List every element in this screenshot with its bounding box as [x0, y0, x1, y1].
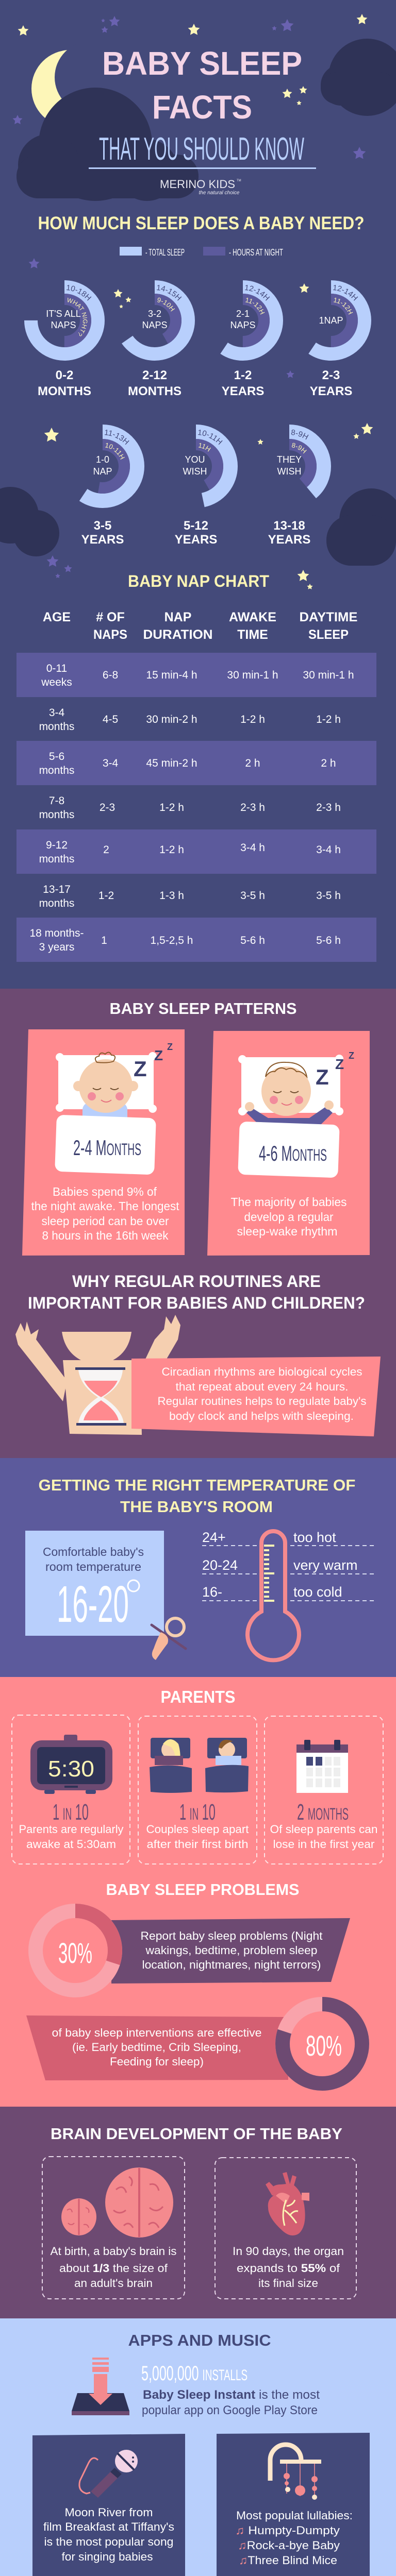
ring chart: 13-18 years: YEARS	[268, 533, 310, 547]
text: 2-4 months fact	[31, 1185, 179, 1242]
heading: room temperature: GETTING THE RIGHT TEMPERATURE OF	[38, 1476, 356, 1494]
panel: couples sleep apart: after their first birth	[146, 1838, 249, 1851]
table body rows: weeks	[41, 676, 72, 688]
panel: parents awake 5:30: awake at 5:30am	[26, 1838, 116, 1851]
section: temperature background	[0, 1458, 396, 1677]
panel: couples sleep apart: 1 IN 10	[179, 1800, 216, 1825]
callout: circadian rhythms: that repeat about every 24 hours.	[175, 1380, 349, 1393]
table body rows: 2 h	[321, 757, 336, 769]
logo: merino kids header: TM	[237, 179, 241, 182]
panel: brain size	[42, 2157, 185, 2299]
section: baby sleep patterns background	[0, 989, 396, 1458]
table body rows: 1-3 h	[159, 890, 184, 902]
table body rows: 2-3 h	[240, 802, 265, 814]
text: app installs: Baby Sleep Instant is the most	[143, 2388, 320, 2402]
ring chart: 2-3 years: 12-14H	[333, 285, 358, 301]
icon: sleeping baby 1: Z	[154, 1047, 163, 1063]
card: moon river song: film Breakfast at Tiffany's	[43, 2520, 174, 2533]
card: moon river song: is the most popular song	[44, 2535, 173, 2548]
banner: 80% interventions: (ie. Early bedtime, Crib Sleeping,	[72, 2041, 241, 2054]
panel: organ growth	[215, 2158, 356, 2299]
card: popular lullabies: ♫Three Blind Mice	[239, 2554, 337, 2567]
text: 2-4 months fact: Babies spend 9% of	[53, 1185, 157, 1198]
table body rows: months	[39, 809, 74, 821]
icon: figure with hourglass	[15, 1315, 180, 1435]
panel: parents awake 5:30: 1 IN 10	[53, 1800, 89, 1825]
heading: why regular routines: IMPORTANT FOR BABIES AND CHILDREN?	[28, 1294, 365, 1312]
callout: circadian rhythms	[131, 1357, 381, 1436]
ring chart: 5-12 years: YEARS	[175, 533, 217, 547]
ring chart: 1-2 years: 2-1	[236, 309, 250, 319]
card: popular lullabies: Most populat lullabies:	[236, 2509, 353, 2522]
icon: waking baby 2: Z	[349, 1050, 354, 1061]
icon: two beds	[150, 1738, 249, 1793]
card: popular lullabies: ♫Rock-a-bye Baby	[238, 2539, 340, 2552]
table body rows: 1-2 h	[316, 714, 341, 725]
table body rows: 2 h	[245, 757, 260, 769]
panel: comfortable temperature: 16-20	[57, 1575, 129, 1633]
table body rows: months	[39, 853, 74, 865]
table body rows: 1	[101, 935, 107, 946]
title: FACTS	[152, 89, 252, 126]
table header row: DURATION	[143, 628, 212, 642]
icon: waking baby 2	[238, 1050, 354, 1131]
banner: 80% interventions	[26, 2015, 288, 2080]
text: app installs: 5,000,000 INSTALLS	[141, 2362, 248, 2385]
panel: comfortable temperature: room temperature	[45, 1560, 141, 1573]
text: 4-6 months fact	[231, 1195, 346, 1238]
subtitle	[89, 131, 316, 169]
table body rows: months	[39, 721, 74, 733]
banner: 30% sleep problems: location, nightmares, night terrors)	[142, 1958, 321, 1971]
heading: room temperature: THE BABY'S ROOM	[120, 1498, 273, 1516]
scale labels: temperature: 20-24	[202, 1557, 238, 1573]
ring chart: 3-5 years	[79, 425, 144, 547]
ring chart: 5-12 years: 5-12	[184, 519, 208, 533]
legend: - TOTAL SLEEP	[145, 247, 185, 258]
table body rows: 9-12	[46, 839, 68, 851]
card: moon river song: for singing babies	[62, 2550, 153, 2563]
scale labels: temperature: very warm	[293, 1557, 358, 1573]
heading: apps and music: APPS AND MUSIC	[128, 2331, 271, 2349]
callout: circadian rhythms: body clock and helps with sleeping.	[169, 1410, 354, 1422]
panel: organ growth: expands to 55% of	[237, 2262, 340, 2275]
heading: brain development: BRAIN DEVELOPMENT OF THE BABY	[51, 2125, 342, 2143]
table body rows: 7-8	[49, 795, 64, 807]
scale labels: temperature: too hot	[293, 1530, 336, 1545]
table body rows: 1-2	[98, 890, 114, 902]
logo: merino kids header	[160, 178, 241, 196]
ring chart: 13-18 years: 8-9H	[291, 430, 308, 440]
table body rows: 2-3 h	[316, 802, 341, 814]
cloud: right header	[321, 39, 396, 116]
icon: waking baby 2: Z	[316, 1065, 329, 1089]
section: brain development background	[0, 2107, 396, 2318]
panel: organ growth: its final size	[258, 2277, 318, 2290]
ring chart: 3-5 years: YEARS	[81, 533, 124, 547]
ring chart: 2-12 months: 2-12	[142, 368, 167, 382]
icon: baby mobile	[270, 2445, 321, 2500]
ring chart: 1-2 years: 12-14H	[245, 285, 270, 301]
banner: 30% sleep problems: Report baby sleep problems (Night	[140, 1929, 323, 1942]
table body rows: 13-17	[43, 884, 71, 895]
table body rows: 1,5-2,5 h	[151, 935, 193, 946]
blanket label: 2-4 months: 2-4 MONTHS	[73, 1136, 141, 1160]
banner: 80% interventions: of baby sleep interventions are effective	[52, 2026, 262, 2039]
panel: organ growth: In 90 days, the organ	[233, 2245, 344, 2258]
panel: 2 months of sleep: Of sleep parents can	[270, 1823, 377, 1836]
table body rows: 0-11	[46, 663, 67, 674]
table body rows: 2-3	[100, 802, 115, 814]
section: apps and music background	[0, 2318, 396, 2576]
blanket label: 2-4 months	[55, 1115, 156, 1175]
icon: microphone	[79, 2450, 138, 2498]
panel: parents awake 5:30: Parents are regularly	[19, 1823, 124, 1836]
ring chart: 2-3 years: 1NAP	[319, 315, 343, 326]
table body rows: 4-5	[103, 714, 118, 725]
ring chart: 13-18 years: THEY	[277, 454, 302, 465]
ring chart: 0-2 months: IT'S ALL	[46, 309, 81, 319]
ring chart: 5-12 years: 10-11H	[198, 430, 223, 445]
heading: baby nap chart: BABY NAP CHART	[128, 572, 269, 590]
text: 2-4 months fact: the night awake. The longest	[31, 1199, 179, 1213]
icon: moon	[31, 41, 127, 127]
table body rows: 18 months-	[29, 927, 84, 939]
icon: waking baby 2: Z	[335, 1056, 344, 1072]
table header row: # OF	[96, 610, 125, 624]
table body rows: 5-6 h	[240, 935, 265, 946]
ring chart: 0-2 months	[24, 280, 105, 398]
table: nap chart	[16, 610, 376, 962]
table body rows: months	[39, 765, 74, 776]
ring chart: 5-12 years: WISH	[183, 466, 207, 477]
card: 2-4 months	[22, 1029, 185, 1256]
icon: calendar	[296, 1740, 348, 1793]
table body rows: 3-4 h	[240, 842, 265, 854]
panel: comfortable temperature	[25, 1531, 164, 1636]
icon: brains	[61, 2167, 173, 2238]
table body rows: 5-6 h	[316, 935, 341, 946]
card: popular lullabies	[217, 2433, 370, 2576]
table header row	[43, 610, 358, 642]
blanket label: 4-6 months: 4-6 MONTHS	[259, 1141, 327, 1165]
ring chart: 3-5 years: 11-13H	[105, 430, 129, 445]
clouds: bottom of rings section	[0, 487, 396, 566]
ring chart: 3-5 years: 10-11H	[105, 443, 125, 460]
ring chart: 5-12 years: YOU	[185, 454, 205, 465]
table body rows: 45 min-2 h	[146, 757, 197, 769]
table body rows: 3 years	[39, 941, 74, 953]
ring chart: 0-2 months: NAPS	[51, 320, 76, 330]
section: parents background	[0, 1677, 396, 2107]
ring chart: 3-5 years: 1-0	[96, 454, 109, 465]
banner: 30% sleep problems	[111, 1918, 350, 1984]
ring chart: 1-2 years: YEARS	[222, 384, 264, 398]
ring chart: 2-3 years: 11-12H	[334, 298, 353, 314]
table body rows: 3-4	[103, 757, 118, 769]
heading: baby nap chart	[47, 555, 313, 590]
table body rows: 2	[103, 844, 109, 856]
section: night header background	[0, 0, 396, 989]
ring chart: 3-5 years: 3-5	[94, 519, 111, 533]
ring chart: 0-2 months: MONTHS	[38, 384, 91, 398]
table body rows: 1-2 h	[159, 844, 184, 856]
callout: circadian rhythms: Circadian rhythms are biological cycles	[162, 1365, 362, 1378]
blanket label: 4-6 months	[238, 1122, 340, 1178]
stars: header	[12, 14, 367, 159]
card: 4-6 months	[207, 1031, 370, 1256]
heading: why regular routines: WHY REGULAR ROUTINES ARE	[72, 1272, 321, 1291]
heading: why regular routines	[28, 1272, 365, 1312]
cloud: left header	[16, 88, 199, 201]
legend: - HOURS AT NIGHT	[229, 247, 283, 258]
icon: sleeping baby 1: Z	[134, 1057, 147, 1081]
text: app installs: popular app on Google Play Store	[142, 2403, 318, 2417]
donut chart: 80%	[283, 2004, 362, 2083]
table header row: AWAKE	[229, 610, 276, 624]
scale labels: temperature	[202, 1530, 375, 1601]
banner: 30% sleep problems: wakings, bedtime, problem sleep	[145, 1944, 318, 1957]
logo: merino kids header: MERINO KIDS	[160, 178, 235, 191]
table body rows: 3-5 h	[316, 890, 341, 902]
ring chart: 1-2 years: 1-2	[234, 368, 252, 382]
ring chart: 5-12 years	[175, 425, 238, 547]
ring chart: 1-2 years: NAPS	[230, 320, 256, 330]
scale labels: temperature: 24+	[202, 1530, 226, 1545]
ring chart: 13-18 years: 13-18	[273, 519, 305, 533]
icon: sleeping baby 1: Z	[167, 1042, 173, 1052]
table body rows: 3-4 h	[316, 844, 341, 856]
panel: couples sleep apart	[138, 1716, 257, 1864]
table header row: SLEEP	[308, 628, 349, 642]
icon: alarm clock	[30, 1735, 112, 1794]
icon: thermometer	[248, 1531, 299, 1660]
text: 2-4 months fact: 8 hours in the 16th week	[42, 1229, 169, 1242]
scale labels: temperature: 16-	[202, 1584, 222, 1600]
text: 2-4 months fact: sleep period can be over	[41, 1214, 169, 1228]
panel: comfortable temperature: Comfortable baby's	[43, 1545, 144, 1558]
ring chart: 13-18 years: WISH	[277, 466, 301, 477]
ring chart: 0-2 months: 0-2	[56, 368, 73, 382]
ring chart: 2-12 months	[122, 280, 195, 398]
callout: circadian rhythms: Regular routines helps to regulate baby's	[158, 1395, 366, 1408]
logo: merino kids header: the natural choice	[199, 190, 240, 196]
ring chart: 2-3 years: 2-3	[322, 368, 340, 382]
ring chart: 13-18 years: 8-9H	[292, 443, 307, 453]
heading: parents: PARENTS	[161, 1687, 235, 1706]
card: moon river song: Moon River from	[65, 2506, 153, 2519]
ring chart: 0-2 months: WHAT NIGHT?	[68, 298, 88, 336]
icon: alarm clock: 5:30	[48, 1756, 94, 1782]
title: BABY SLEEP	[102, 45, 302, 82]
ring chart: 1-2 years: 11-12H	[245, 298, 265, 314]
card: moon river song	[32, 2434, 185, 2576]
icon: heart organ	[266, 2172, 309, 2235]
ring chart: 0-2 months: 10-18H	[67, 285, 92, 301]
table header row: AGE	[43, 610, 71, 624]
panel: brain size: an adult's brain	[74, 2277, 153, 2290]
ring chart: 2-3 years: YEARS	[310, 384, 352, 398]
panel: 2 months of sleep	[265, 1716, 383, 1864]
ring chart: 2-12 months: MONTHS	[128, 384, 182, 398]
text: 4-6 months fact: sleep-wake rhythm	[237, 1225, 337, 1238]
banner: 80% interventions: Feeding for sleep)	[110, 2055, 204, 2068]
text: 4-6 months fact: develop a regular	[244, 1210, 334, 1224]
table body rows: 1-2 h	[240, 714, 265, 725]
scale labels: temperature: too cold	[293, 1584, 342, 1600]
ring chart: 1-2 years	[220, 280, 283, 398]
heading: how much sleep: HOW MUCH SLEEP DOES A BABY NEED?	[38, 213, 364, 233]
table body rows: 3-4	[49, 707, 64, 719]
stars: rings area	[29, 258, 373, 445]
table body rows	[29, 663, 354, 953]
table header row: DAYTIME	[299, 610, 358, 624]
ring chart: 2-12 months: 9-10H	[157, 298, 175, 311]
donut chart: 30%	[36, 1911, 115, 1990]
table body rows: 30 min-1 h	[303, 669, 354, 681]
legend	[120, 247, 283, 258]
panel: parents awake 5:30	[12, 1715, 130, 1864]
ring chart: 13-18 years	[268, 425, 331, 547]
text: app installs	[141, 2362, 320, 2417]
table header row: TIME	[237, 628, 268, 642]
ring chart: 2-12 months: NAPS	[142, 320, 168, 330]
table header row: NAP	[164, 610, 191, 624]
table body rows: months	[39, 897, 74, 909]
table body rows: 5-6	[49, 751, 64, 762]
icon: download	[72, 2358, 129, 2415]
title	[102, 45, 302, 126]
ring chart: 2-3 years	[308, 280, 371, 398]
table body rows: 6-8	[103, 669, 118, 681]
ring chart: 3-5 years: NAP	[93, 466, 112, 477]
panel: couples sleep apart: Couples sleep apart	[146, 1823, 249, 1836]
panel: 2 months of sleep: lose in the first year	[273, 1838, 374, 1851]
text: 4-6 months fact: The majority of babies	[231, 1195, 346, 1209]
table body rows: 15 min-4 h	[146, 669, 197, 681]
heading: baby sleep patterns: BABY SLEEP PATTERNS	[109, 999, 297, 1018]
heading: room temperature	[38, 1476, 356, 1516]
icon: pacifier	[152, 1618, 186, 1660]
table body rows: 30 min-2 h	[146, 714, 197, 725]
table header row: NAPS	[93, 628, 127, 642]
card: popular lullabies: ♫ Humpty-Dumpty	[235, 2524, 340, 2537]
panel: brain size: about 1/3 the size of	[59, 2262, 168, 2275]
donut chart: 80%: 80%	[306, 2029, 342, 2062]
table body rows: 3-5 h	[240, 890, 265, 902]
icon: sleeping baby 1	[56, 1042, 173, 1126]
ring chart: 2-12 months: 3-2	[148, 309, 161, 319]
table body rows: 30 min-1 h	[227, 669, 278, 681]
ring chart: 2-12 months: 14-15H	[157, 285, 182, 301]
donut chart: 30%: 30%	[58, 1937, 92, 1969]
panel: 2 months of sleep: 2 MONTHS	[297, 1800, 349, 1825]
panel: brain size: At birth, a baby's brain is	[51, 2245, 176, 2258]
table body rows: 1-2 h	[159, 802, 184, 814]
ring chart: 5-12 years: 11H	[199, 443, 211, 452]
heading: baby sleep problems: BABY SLEEP PROBLEMS	[106, 1880, 299, 1899]
